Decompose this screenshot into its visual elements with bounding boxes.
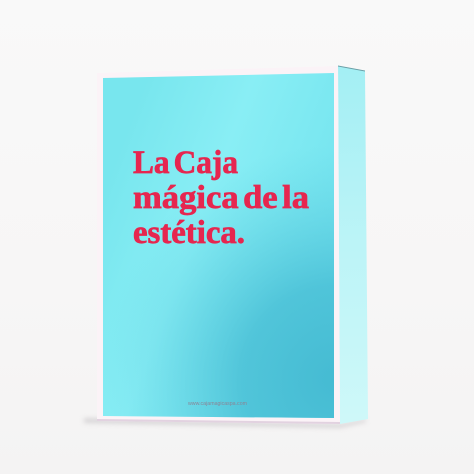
box front cyan panel <box>103 73 334 418</box>
title line 1: La Caja <box>133 145 238 181</box>
title <box>133 145 309 251</box>
title line 3: estética. <box>133 215 245 251</box>
website footer text: www.cajamagicaspa.com <box>188 401 247 407</box>
floor shadow <box>84 418 366 428</box>
box front white border <box>97 66 340 424</box>
box side panel <box>338 66 368 424</box>
title line 2: mágica de la <box>133 180 309 216</box>
bottom edge of box <box>97 419 340 424</box>
